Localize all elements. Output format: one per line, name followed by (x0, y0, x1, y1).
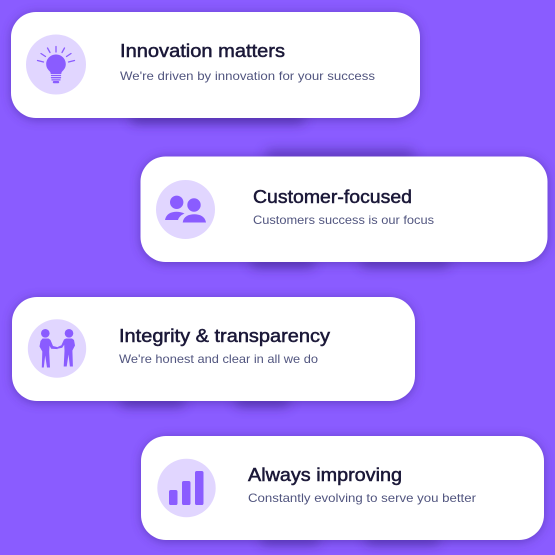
panel: Innovation matters (11, 12, 420, 123)
heading: Integrity & transparency (119, 326, 330, 346)
icon: bar chart (157, 459, 216, 517)
panel: Always improving (141, 436, 544, 544)
text block: We're driven by innovation for your success (120, 69, 375, 83)
heading: Customer-focused (253, 187, 412, 207)
icon: light bulb (26, 34, 86, 94)
text block: Customers success is our focus (253, 213, 434, 227)
text block: We're honest and clear in all we do (119, 352, 318, 366)
heading: Always improving (248, 465, 402, 485)
text block: Constantly evolving to serve you better (248, 491, 476, 505)
icon: handshake (28, 319, 86, 378)
panel: Integrity & transparency (12, 297, 415, 406)
heading: Innovation matters (120, 41, 285, 61)
icon: two people (156, 180, 215, 239)
panel: Customer-focused (140, 150, 548, 267)
